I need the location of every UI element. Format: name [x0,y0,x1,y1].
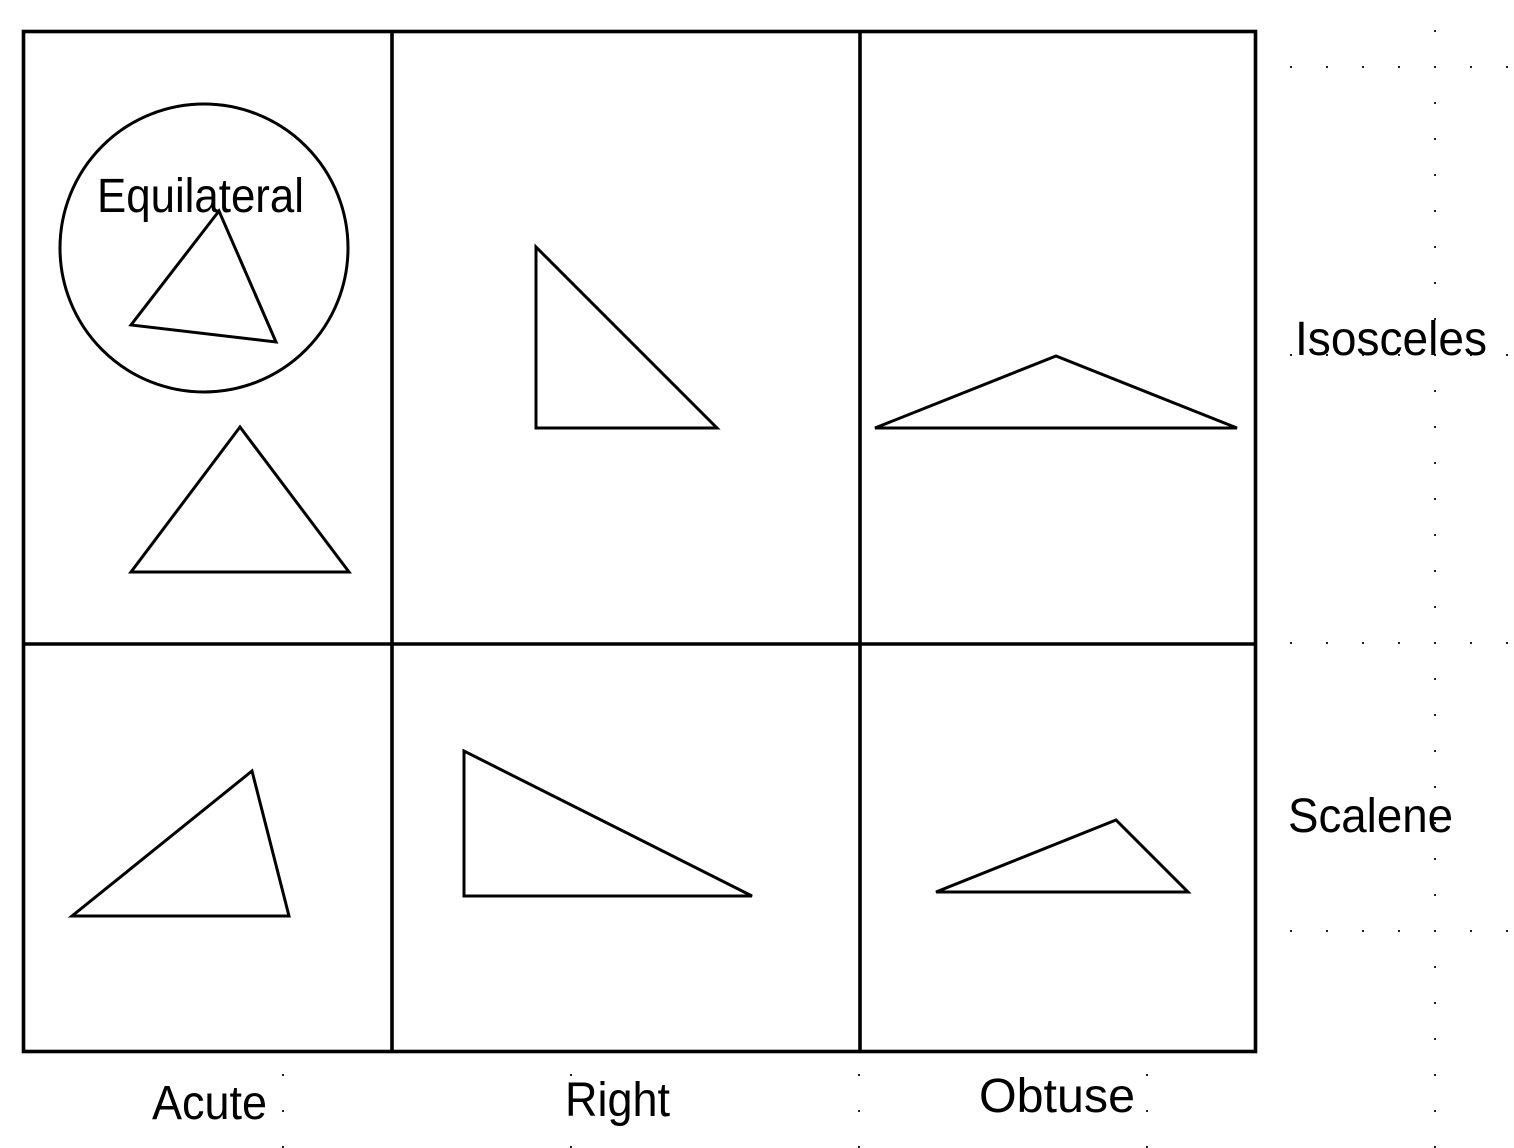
triangle: obtuse scalene [936,820,1188,892]
classification grid table [23,31,1256,1052]
grid outer frame [24,32,1256,1052]
label: Equilateral: Equilateral [97,170,304,223]
triangle: acute isosceles [131,427,349,572]
triangle: right isosceles [536,247,717,428]
triangle: right scalene [464,751,752,896]
equilateral callout: circle, label and triangle [60,104,348,392]
triangle: acute scalene [72,771,289,916]
triangle: equilateral [131,211,276,342]
row label: Isosceles: Isosceles [1295,313,1487,366]
triangle: obtuse isosceles [875,356,1237,428]
column label: Right: Right [565,1074,670,1127]
grid column divider: acute / right [390,31,394,1052]
circle around equilateral [60,104,348,392]
grid row divider: isosceles / scalene [23,642,1256,646]
column label: Obtuse: Obtuse [979,1070,1135,1123]
grid column divider: right / obtuse [858,31,862,1052]
row label: Scalene: Scalene [1288,790,1453,843]
column label: Acute: Acute [152,1077,267,1130]
